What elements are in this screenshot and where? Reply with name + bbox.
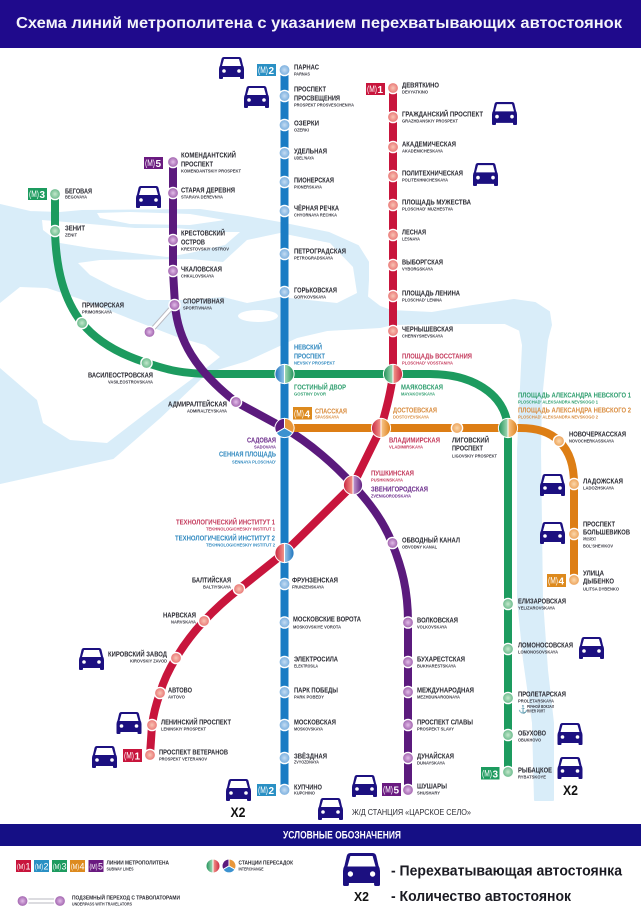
station labels: line 1: KIROVSKIY ZAVOD [130,658,167,664]
station labels: line 1: ГРАЖДАНСКИЙ ПРОСПЕКТ [402,110,484,118]
underpass with travelators [144,305,174,338]
station labels: line 5: ZVENIGORODSKAYA [371,494,411,498]
station labels: line 1: DEVYATKINO [402,90,429,94]
station labels: line 2: PIONERSKAYA [294,184,322,190]
station labels: line 5: ПРОСПЕКТ СЛАВЫ [417,720,473,726]
station labels: line 1: PLOSCHAD' MUZHESTVA [402,206,453,212]
station labels: line 5: СТАРАЯ ДЕРЕВНЯ [181,188,235,194]
legend: subway lines: (M) [71,864,79,871]
station labels: line 4: ЛИГОВСКИЙ [452,436,489,444]
station labels: line 1: PLOSCHAD' LENINA [402,298,442,302]
station labels: line 3: ЛОМОНОСОВСКАЯ [518,642,573,650]
station labels: line 1: POLITEKHNICHESKAYA [402,178,448,182]
icon: parking cars [79,57,604,820]
line badge: 2 bottom [257,784,276,797]
station labels: line 3: PROLETARSKAYA [518,698,554,704]
stations: line 1 [144,82,399,761]
station labels: line 4: ПРОСПЕКТ [583,522,616,528]
legend: interchange stations: СТАНЦИИ ПЕРЕСАДОК [238,860,294,866]
station labels: line 2: КУПЧИНО [294,784,322,792]
legend: parking icon and count: - Количество автостоянок [391,888,571,905]
line badge: 1 top: (M) [367,84,377,94]
legend: parking icon and count: - Перехватывающая автостоянка [391,862,623,880]
station labels: line 3: RYBATSKOYE [518,774,546,780]
station labels: line 5: VOLKOVSKAYA [417,624,447,630]
station labels: line 1: ПЛОЩАДЬ ВОССТАНИЯ [402,354,472,360]
legend: parking icon and count: X2 [354,890,369,904]
station labels: line 3: VASILEOSTROVSKAYA [108,380,153,384]
legend: subway lines [16,860,169,872]
legend: subway lines: SUBWAY LINES [106,866,134,872]
station labels: line 1: AVTOVO [168,694,186,700]
station labels: line 1: PLOSCHAD' VOSSTANIYA [402,360,453,366]
station labels: line 1: ДЕВЯТКИНО [402,82,439,90]
station labels: line 1: AKADEMICHESKAYA [402,148,443,154]
station labels: line 1: ДОСТОЕВСКАЯ [393,408,437,414]
line badge: 2 top: (M) [258,65,268,75]
station labels: line 5 [168,150,474,796]
station labels: line 5: SHUSHARY [417,790,440,796]
station labels: line 3: ОБУХОВО [518,730,546,738]
station labels: line 2: ТЕХНОЛОГИЧЕСКИЙ ИНСТИТУТ 2 [175,534,275,542]
station labels: line 3: ВАСИЛЕОСТРОВСКАЯ [88,372,153,380]
station labels: line 1: ПОЛИТЕХНИЧЕСКАЯ [402,170,463,178]
station labels: line 5: SPORTIVNAYA [183,306,212,310]
station labels: line 5: DUNAYSKAYA [417,760,445,766]
station labels: line 2: ПАРНАС [294,64,319,72]
interchange: Dostoevskaya / Vladimirskaya [371,418,391,438]
station labels: line 5: ШУШАРЫ [417,784,447,790]
station labels: line 5: ЗВЕНИГОРОДСКАЯ [371,486,428,494]
station labels: line 2: ПАРК ПОБЕДЫ [294,688,338,694]
station labels: line 2: ПЕТРОГРАДСКАЯ [294,248,346,256]
station labels: line 5: PROSPEKT SLAVY [417,726,454,732]
station labels: line 3: YELIZAROVSKAYA [518,606,555,610]
line badge: 3 top: 3 [40,190,46,201]
station labels: line 1: LESNAYA [402,236,420,242]
line badge: 5 bottom [382,783,401,796]
station labels: line 2: PARK POBEDY [294,694,324,700]
station labels: line 2: СЕННАЯ ПЛОЩАДЬ [219,452,276,458]
line badge: 4 bottom [547,574,566,588]
station labels: line 5: MEZHDUNARODNAYA [417,694,460,700]
station labels: line 1: ПУШКИНСКАЯ [371,470,414,478]
station labels: line 3: LOMONOSOVSKAYA [518,650,558,654]
railway station label: Ж/Д СТАНЦИЯ «ЦАРСКОЕ СЕЛО» [352,807,471,817]
station labels: line 2: ОЗЕРКИ [294,120,319,128]
station labels: line 1: ЛЕСНАЯ [402,230,426,236]
station labels: line 1: VLADIMIRSKAYA [389,444,423,450]
line 2 blue [280,70,288,790]
legend: underpass with travelators: ПОДЗЕМНЫЙ ПЕРЕХОД С ТРАВОЛАТОРАМИ [72,894,180,902]
interchange: Sadovaya / Sennaya / Spasskaya [275,418,294,438]
station labels: line 2: PROSPEKT PROSVESCHENIYA [294,102,354,108]
line badge: 3 bottom: (M) [482,768,492,778]
station labels: line 2: TEKHNOLOGICHESKIY INSTITUT 2 [206,542,276,548]
legend: underpass with travelators: UNDERPASS WITH TRAVELATORS [72,902,132,906]
station labels: line 1: ВЛАДИМИРСКАЯ [389,438,440,444]
interchange: Pushkinskaya / Zvenigorodskaya [343,475,363,495]
legend: subway lines: 1 [26,862,31,872]
legend: interchange stations: INTERCHANGE [238,866,264,872]
station labels: line 4: ULITSA DYBENKO [583,586,620,592]
station labels: line 3: БЕГОВАЯ [65,188,92,196]
line badge: 1 top [366,83,385,96]
legend: subway lines: 3 [62,862,67,872]
station labels: line 1: ЛЕНИНСКИЙ ПРОСПЕКТ [161,718,232,726]
stations: line 2 [279,64,290,796]
line badge: 5 top: (M) [145,158,155,168]
line badge: 2 bottom: (M) [258,785,268,795]
station labels: line 1: GRAZHDANSKIY PROSPEKT [402,118,458,124]
station labels: line 2: SENNAYA PLOSCHAD' [232,460,276,464]
line badge: 1 bottom [123,749,142,762]
station labels: line 5: KOMENDANTSKIY PROSPEKT [181,168,241,174]
station labels: line 1: BALTIYSKAYA [203,584,231,590]
station labels: line 5: ВОЛКОВСКАЯ [417,618,458,624]
station labels: line 3: ЕЛИЗАРОВСКАЯ [518,598,566,606]
station labels: line 1: DOSTOYEVSKAYA [393,414,429,420]
station labels: line 1: АКАДЕМИЧЕСКАЯ [402,142,456,148]
stations: line 5 [167,156,414,796]
station labels: line 5: STARAYA DEREVNYA [181,194,223,200]
station labels: line 1: ПЛОЩАДЬ ЛЕНИНА [402,290,460,298]
station labels: line 1 [108,82,484,762]
station labels: line 2: ГОСТИНЫЙ ДВОР [294,382,346,392]
station labels: line 2: ФРУНЗЕНСКАЯ [292,578,338,584]
station labels: line 1: КИРОВСКИЙ ЗАВОД [108,650,167,658]
station labels: line 5: БУХАРЕСТСКАЯ [417,656,465,664]
station labels: line 1: ПЛОЩАДЬ МУЖЕСТВА [402,200,471,206]
station labels: line 4: NOVOCHERKASSKAYA [569,438,614,444]
station labels: line 1: NARVSKAYA [171,620,196,624]
station labels: line 2: PARNAS [294,72,310,76]
station labels: line 5: KRESTOVSKIY OSTROV [181,246,229,252]
station labels: line 5: АДМИРАЛТЕЙСКАЯ [168,400,227,408]
stations: line 3 [49,188,514,778]
interchange: Tekhnologichesky Institut [275,543,294,563]
legend: interchange stations [206,859,294,873]
station labels: line 2: ГОРЬКОВСКАЯ [294,288,337,294]
station labels: line 2: FRUNZENSKAYA [292,584,324,590]
legend: underpass with travelators [17,894,180,907]
station labels: line 1: ЧЕРНЫШЕВСКАЯ [402,326,453,334]
line badge: 5 bottom: 5 [394,786,400,796]
station labels: line 4: LIGOVSKIY PROSPEKT [452,454,497,458]
station labels: line 1: PROSPEKT VETERANOV [159,756,207,762]
station labels: line 2: МОСКОВСКАЯ [294,720,336,726]
station labels: line 2: ЗВЁЗДНАЯ [294,752,327,760]
station labels: line 4: PLOSCHAD' ALEKSANDRA NEVSKOGO 2 [518,414,599,420]
station labels: line 2: САДОВАЯ [247,438,276,444]
legend: subway lines: 2 [44,862,49,872]
legend: subway lines: (M) [35,864,43,871]
header bar [0,0,641,48]
legend: subway lines: (M) [53,864,61,871]
station labels: line 3: ПРИМОРСКАЯ [82,302,124,310]
station labels: line 2: GOR'KOVSKAYA [294,294,326,300]
legend: subway lines: (M) [90,864,98,871]
line 4 orange [284,428,574,580]
station labels: line 3: ПРОЛЕТАРСКАЯ [518,692,566,698]
line badge: 1 top: 1 [378,85,384,96]
station labels: line 5: МЕЖДУНАРОДНАЯ [417,688,474,694]
station labels: line 5: OBVODNY KANAL [402,544,437,550]
line 3 green [55,194,508,772]
station labels: line 1: LENINSKIY PROSPEKT [161,726,206,732]
station labels: line 2: OZERKI [294,128,309,132]
station labels: line 1: VYBORGSKAYA [402,266,433,272]
station labels: line 2: НЕВСКИЙ [294,342,322,352]
station labels: line 2: TEKHNOLOGICHESKIY INSTITUT 1 [206,526,276,532]
station labels: line 1: ВЫБОРГСКАЯ [402,260,443,266]
station labels: line 3: ЗЕНИТ [65,226,86,232]
station labels: line 2: ПРОСВЕЩЕНИЯ [294,96,340,102]
station labels: line 5: ADMIRALTEYSKAYA [187,408,227,414]
river port note: РЕЧНОЙ ВОКЗАЛ [527,704,554,709]
station labels: line 5: ПРОСПЕКТ [181,162,214,168]
station labels: line 3: BEGOVAYA [65,194,87,200]
station labels: line 2: МОСКОВСКИЕ ВОРОТА [293,616,361,624]
station labels: line 5: CHKALOVSKAYA [181,274,214,278]
station labels: line 5: ОСТРОВ [181,240,205,246]
interchange: Vosstaniya / Mayakovskaya [383,364,403,384]
legend: subway lines: 4 [80,862,85,872]
station labels: line 2: SADOVAYA [254,444,276,450]
line badge: 3 top: (M) [29,189,39,199]
station labels: line 4: ПРОСПЕКТ [452,446,484,452]
station labels: line 2: ПИОНЕРСКАЯ [294,178,334,184]
station labels: line 4: ЛАДОЖСКАЯ [583,478,623,486]
station labels: line 2: NEVSKY PROSPEKT [294,360,335,366]
station labels: line 5: КОМЕНДАНТСКИЙ [181,150,236,160]
stations: line 4 [451,422,580,586]
line badge: 2 top [257,64,276,77]
station labels: line 4: PROSPEKT [583,536,596,542]
river port note: RIVER PORT [527,708,545,714]
station labels: line 3: OBUKHOVO [518,738,542,742]
station labels: line 1: МАЯКОВСКАЯ [401,384,443,392]
station labels: line 2: ЧЁРНАЯ РЕЧКА [294,204,339,212]
line 5 purple [173,162,408,790]
line badge: 3 top [28,188,47,201]
station labels: line 5: ЧКАЛОВСКАЯ [181,266,222,274]
station labels: line 2: ZVYOZDNAYA [294,760,319,764]
station labels: line 5: ОБВОДНЫЙ КАНАЛ [402,536,460,544]
station labels: line 4: BOL'SHEVIKOV [583,544,613,548]
station labels: line 2: ПРОСПЕКТ [294,354,326,360]
interchange: Nevsky / Gostiny [275,364,294,384]
station labels: line 2: CHYORNAYA RECHKA [294,212,337,218]
line 1 red [150,88,393,755]
station labels: line 2: ПРОСПЕКТ [294,86,327,94]
station labels: line 2: ЭЛЕКТРОСИЛА [294,656,338,664]
station labels: line 3: ZENIT [65,232,77,238]
line badge: 1 bottom: 1 [134,752,140,762]
station labels: line 1: НАРВСКАЯ [163,612,196,620]
station labels: line 5: ДУНАЙСКАЯ [417,752,454,760]
station labels: line 3: PRIMORSKAYA [82,310,112,314]
station labels: line 2: ELEKTROSILA [294,664,318,668]
station labels: line 5: КРЕСТОВСКИЙ [181,228,225,238]
station labels: line 2: SPASSKAYA [315,414,339,420]
line badge: 5 bottom: (M) [383,784,393,794]
station labels: line 4: БОЛЬШЕВИКОВ [583,530,630,536]
river port note [518,704,554,714]
station labels: line 2: УДЕЛЬНАЯ [294,148,327,156]
legend header bar [0,824,641,846]
line badge: 3 bottom: 3 [492,770,498,780]
line badge: 2 top: 2 [268,66,274,77]
line badge: 4 top: 4 [304,410,310,420]
station labels: line 2: ТЕХНОЛОГИЧЕСКИЙ ИНСТИТУТ 1 [176,518,275,526]
line badge: 4 top [293,407,312,420]
title: Схема линий метрополитена с указанием перехватывающих автостоянок [16,15,622,32]
station labels: line 2: KUPCHINO [294,790,316,796]
count X2 Rybatskoye: X2 [563,783,578,798]
interchange: Alexander Nevsky [498,418,518,438]
station labels: line 5: BUKHARESTSKAYA [417,664,456,668]
count X2 Kupchino: X2 [230,805,246,820]
line badge: 4 top: (M) [294,408,304,418]
station labels: line 4: LADOZHSKAYA [583,486,614,490]
station labels: line 2 [175,64,361,796]
station labels: line 3: PLOSCHAD' ALEKSANDRA NEVSKOGO 1 [518,400,599,404]
station labels: line 1: PUSHKINSKAYA [371,478,403,482]
legend header bar: УСЛОВНЫЕ ОБОЗНАЧЕНИЯ [283,830,401,842]
station labels: line 3 [65,188,631,780]
legend: subway lines: ЛИНИИ МЕТРОПОЛИТЕНА [106,860,169,866]
station labels: line 1: БАЛТИЙСКАЯ [192,576,231,584]
station labels: line 4: УЛИЦА [583,570,604,578]
line badge: 5 top: 5 [156,159,162,170]
station labels: line 2: MOSKOVSKIYE VOROTA [293,624,341,630]
station labels: line 2: GOSTINY DVOR [294,392,326,396]
station labels: line 5: СПОРТИВНАЯ [183,298,224,306]
station labels: line 1: CHERNYSHEVSKAYA [402,334,443,338]
legend: parking icon and count [343,853,623,905]
river port note: ⚓ [518,704,528,714]
line badge: 1 bottom: (M) [124,750,134,760]
station labels: line 2: UDEL'NAYA [294,156,314,160]
line badge: 2 bottom: 2 [268,786,274,797]
station labels: line 1: АВТОВО [168,688,192,694]
legend: subway lines: (M) [17,864,25,871]
legend: subway lines: 5 [98,862,103,872]
station labels: line 1: ПРОСПЕКТ ВЕТЕРАНОВ [159,750,228,756]
line badge: 4 bottom: 4 [558,576,564,588]
station labels: line 4: ДЫБЕНКО [583,578,614,586]
station labels: line 3: РЫБАЦКОЕ [518,768,552,774]
station labels: line 2: СПАССКАЯ [315,408,347,416]
line badge: 4 bottom: (M) [548,576,558,586]
station labels: line 2: MOSKOVSKAYA [294,726,323,732]
line badge: 3 bottom [481,767,500,780]
line badge: 5 top [144,157,163,170]
water background [0,205,553,800]
station labels: line 1: MAYAKOVSKAYA [401,392,435,396]
station labels: line 4: НОВОЧЕРКАССКАЯ [569,432,626,438]
station labels: line 4 [452,408,631,592]
station labels: line 2: PETROGRADSKAYA [294,256,333,260]
